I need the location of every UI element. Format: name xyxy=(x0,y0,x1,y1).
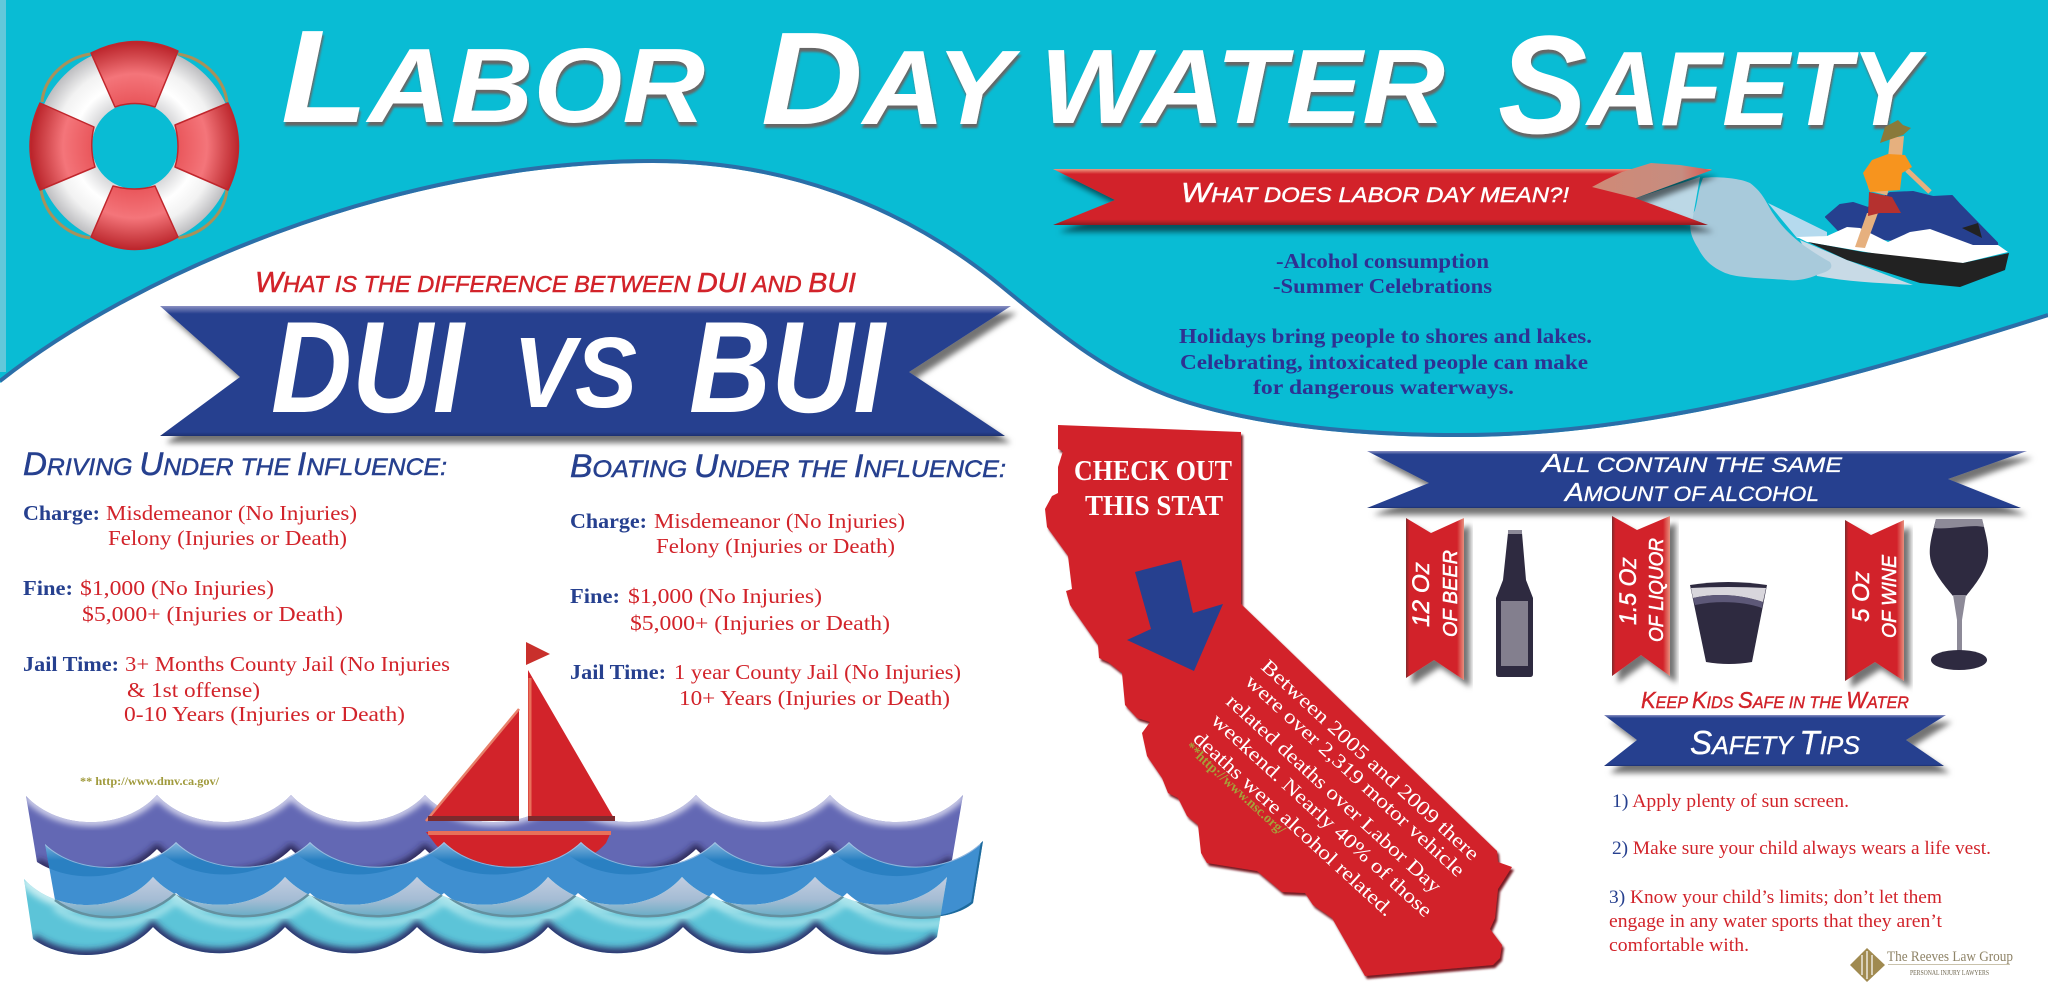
banner: safety tips xyxy=(1604,715,1946,766)
jail time row xyxy=(570,660,961,710)
alcohol: wine xyxy=(1845,519,1988,681)
charge row xyxy=(570,509,905,558)
alcohol: beer xyxy=(1406,518,1533,680)
heading: boating: BOATING UNDER THE INFLUENCE: xyxy=(570,448,1006,484)
charge row: Charge: xyxy=(23,501,100,525)
tip 1: 1) Apply plenty of sun screen. xyxy=(1612,791,1849,812)
banner: all contain the same amount of alcohol: AMOUNT OF ALCOHOL xyxy=(1563,477,1819,507)
ribbon: 5 oz of wine xyxy=(1845,520,1904,681)
heading: what is the difference: WHAT IS THE DIFFERENCE BETWEEN DUI AND BUI xyxy=(255,267,856,299)
banner: safety tips: SAFETY TIPS xyxy=(1690,724,1860,761)
tip 3: engage in any water sports that they aren’t xyxy=(1609,911,1943,932)
icon: wine glass xyxy=(1930,519,1988,670)
back wave layer xyxy=(26,795,963,876)
jet ski rider xyxy=(1797,120,2009,287)
fine row: Fine: xyxy=(570,584,620,608)
stat heading: THIS STAT xyxy=(1085,490,1223,522)
teal header wave background xyxy=(0,0,2048,437)
charge row: Felony (Injuries or Death) xyxy=(108,526,347,550)
ribbon: 1.5 oz of liquor: OF LIQUOR xyxy=(1646,538,1668,642)
stat heading xyxy=(1074,455,1232,522)
tip 3 xyxy=(1609,887,1943,956)
charge row xyxy=(23,501,357,550)
ribbon: 5 oz of wine: OF WINE xyxy=(1879,554,1901,638)
jail time row: & 1st offense) xyxy=(127,678,260,702)
ribbon: 1.5 oz of liquor xyxy=(1612,516,1670,676)
title: WATER xyxy=(1040,28,1445,146)
tip 2: 2) Make sure your child always wears a life vest. xyxy=(1612,838,1991,859)
ribbon: 1.5 oz of liquor: 1.5 OZ xyxy=(1615,557,1642,625)
charge row: Charge: xyxy=(570,509,647,533)
stat text: related deaths over Labor Day xyxy=(1222,690,1445,898)
jet ski wake xyxy=(1636,177,1913,285)
text: labor day meaning: -Summer Celebrations xyxy=(1273,274,1492,298)
fine row: $5,000+ (Injuries or Death) xyxy=(82,602,343,626)
charge row: Felony (Injuries or Death) xyxy=(656,534,895,558)
banner: DUI vs BUI xyxy=(160,294,1011,440)
fine row: Fine: xyxy=(23,576,73,600)
charge row: Misdemeanor (No Injuries) xyxy=(106,501,357,525)
tip 3: comfortable with. xyxy=(1609,935,1749,956)
text: labor day meaning: -Alcohol consumption xyxy=(1276,249,1489,273)
stat heading: CHECK OUT xyxy=(1074,455,1232,487)
jail time row xyxy=(23,652,450,726)
fine row: $5,000+ (Injuries or Death) xyxy=(630,611,890,635)
title: S xyxy=(1498,6,1587,163)
ribbon: 12 oz of beer: OF BEER xyxy=(1440,550,1462,637)
citation: nsc: **http://www.nsc.org/ xyxy=(1182,740,1288,839)
citation: dmv: ** http://www.dmv.ca.gov/ xyxy=(80,774,220,788)
heading: driving: DRIVING UNDER THE INFLUENCE: xyxy=(23,446,447,482)
jail time row: 3+ Months County Jail (No Injuries xyxy=(125,652,450,676)
icon: life buoy xyxy=(30,41,238,249)
icon: sailboat xyxy=(426,642,615,871)
front wave layer xyxy=(24,877,947,955)
tip 3: 3) Know your child’s limits; don’t let them xyxy=(1609,887,1942,908)
jail time row: 10+ Years (Injuries or Death) xyxy=(679,686,950,710)
banner: all contain the same amount of alcohol xyxy=(1367,448,2027,508)
stat text xyxy=(1189,655,1484,922)
ribbon: 5 oz of wine: 5 OZ xyxy=(1848,571,1875,622)
icon: beer bottle xyxy=(1496,530,1533,677)
banner: DUI vs BUI: VS xyxy=(513,317,637,429)
text: labor day meaning: for dangerous waterways. xyxy=(1253,375,1514,399)
title: DAY xyxy=(761,5,1021,152)
ribbon: 12 oz of beer xyxy=(1406,518,1464,680)
title xyxy=(281,3,1927,163)
fine row: $1,000 (No Injuries) xyxy=(80,576,274,600)
stat text: deaths were alcohol related. xyxy=(1189,727,1398,921)
fine row xyxy=(23,576,343,626)
ribbon: 12 oz of beer: 12 OZ xyxy=(1408,562,1435,627)
panel: california stat xyxy=(1045,425,1512,976)
title: LABOR xyxy=(281,3,705,150)
title: AFETY xyxy=(1584,30,1927,148)
heading: keep kids safe: KEEP KIDS SAFE IN THE WATER xyxy=(1641,687,1909,713)
jail time row: Jail Time: xyxy=(570,660,666,684)
jail time row: Jail Time: xyxy=(23,652,119,676)
jail time row: 1 year County Jail (No Injuries) xyxy=(674,660,961,684)
banner: what does labor day mean xyxy=(1053,163,1712,225)
middle wave layer xyxy=(45,841,983,916)
california map shape xyxy=(1045,425,1512,976)
icon: liquor cup xyxy=(1690,582,1767,664)
logo: the reeves law group: The Reeves Law Group xyxy=(1887,949,2013,965)
panel: boating under the influence xyxy=(570,448,1006,710)
text: labor day meaning xyxy=(1179,249,1592,399)
fine row xyxy=(570,584,890,635)
arrow pointing down xyxy=(1127,560,1223,671)
stat text: were over 2,319 motor vehicle xyxy=(1241,670,1469,882)
stat text: Between 2005 and 2009 there xyxy=(1257,655,1484,865)
banner: what does labor day mean: WHAT DOES LABOR DAY MEAN?! xyxy=(1181,177,1569,208)
jail time row: 0-10 Years (Injuries or Death) xyxy=(124,702,405,726)
text: safety tips list xyxy=(1609,791,1991,956)
text: labor day meaning: Celebrating, intoxicated people can make xyxy=(1180,350,1588,374)
logo: the reeves law group xyxy=(1850,948,2013,982)
banner: all contain the same amount of alcohol: ALL CONTAIN THE SAME xyxy=(1540,448,1843,478)
banner: DUI vs BUI: BUI xyxy=(689,294,888,440)
banner: DUI vs BUI: DUI xyxy=(271,294,466,440)
panel: driving under the influence xyxy=(23,446,450,788)
alcohol: liquor xyxy=(1612,516,1767,676)
stat text: weekend. Nearly 40% of those xyxy=(1207,709,1436,922)
logo: the reeves law group: PERSONAL INJURY LAWYERS xyxy=(1910,969,1989,977)
charge row: Misdemeanor (No Injuries) xyxy=(654,509,905,533)
fine row: $1,000 (No Injuries) xyxy=(628,584,822,608)
text: labor day meaning: Holidays bring people to shores and lakes. xyxy=(1179,324,1592,348)
